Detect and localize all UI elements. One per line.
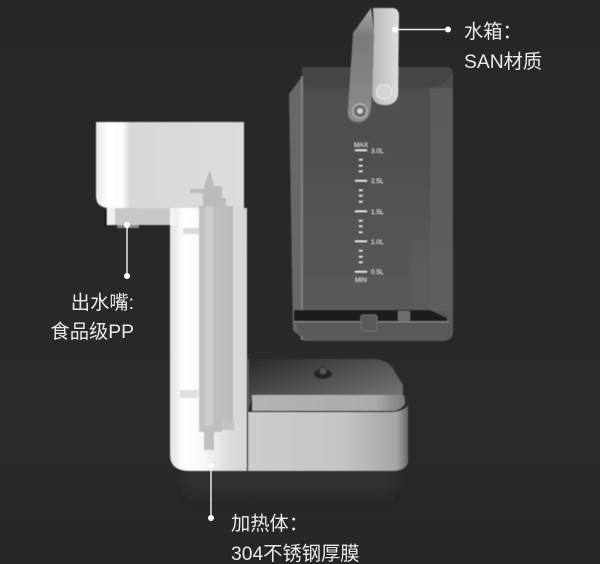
capacity scale: 1.0L: [371, 239, 384, 246]
tank right inner wall: [430, 88, 453, 310]
floor reflection: [185, 473, 395, 503]
water tank: [289, 8, 453, 341]
capacity scale: MAX: [354, 142, 369, 149]
internal heater: [180, 170, 234, 450]
column: [170, 208, 247, 471]
callout: nozzle: [50, 222, 134, 343]
callout: tank: SAN材质: [464, 51, 542, 73]
base valve: [314, 369, 332, 379]
capacity scale: 3.0L: [371, 148, 384, 155]
capacity scale: 0.5L: [371, 269, 384, 276]
callout: nozzle: 食品级PP: [50, 321, 134, 343]
handle strap: [348, 8, 399, 122]
base lid top: [248, 359, 403, 411]
tank bottom tray: [294, 310, 451, 340]
tank body: [289, 67, 453, 341]
base front: [248, 405, 408, 471]
callout: tank: 水箱：: [464, 21, 522, 43]
callout: tank: [392, 21, 542, 73]
base: [248, 359, 408, 471]
capacity scale: [354, 142, 384, 284]
capacity scale: MIN: [355, 277, 367, 284]
capacity scale: 1.5L: [371, 209, 384, 216]
callout: nozzle: 出水嘴:: [71, 292, 134, 314]
head unit: [96, 122, 244, 208]
callout: heater: [208, 463, 360, 564]
tank top rim: [302, 67, 453, 88]
capacity scale: 2.5L: [371, 178, 384, 185]
callout: heater: 加热体：: [231, 513, 308, 535]
tank left edge: [289, 76, 305, 340]
nozzle: [105, 208, 175, 228]
base lid side: [252, 395, 405, 411]
dispenser body: [96, 122, 247, 471]
